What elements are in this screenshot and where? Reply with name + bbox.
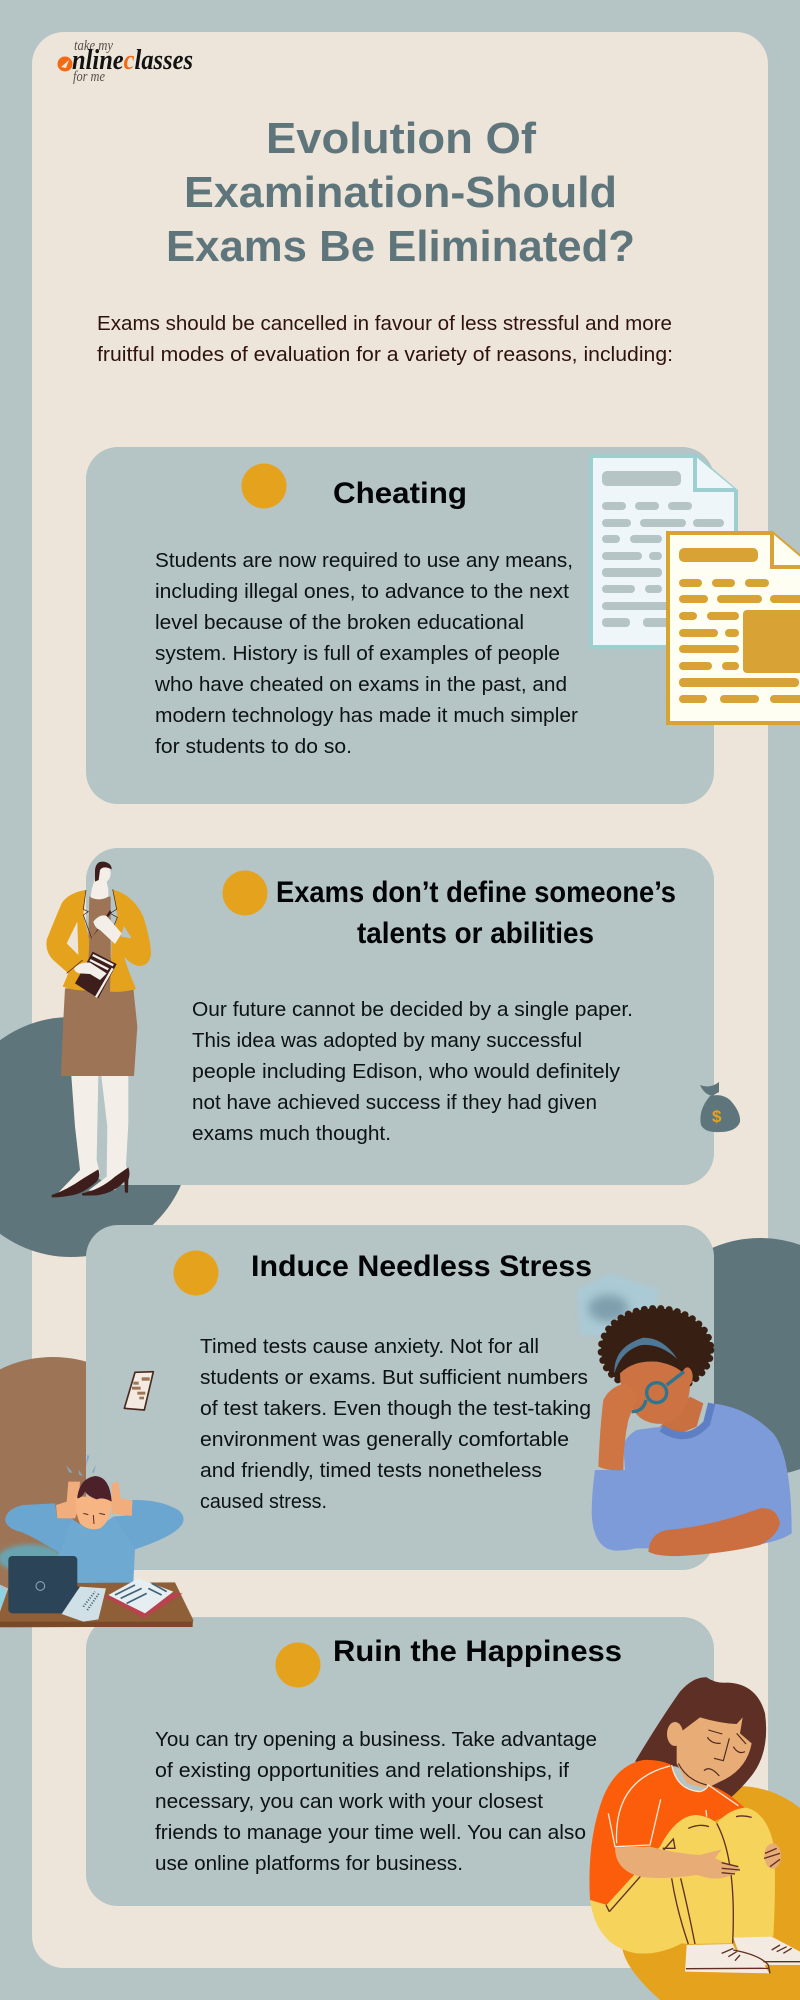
body text: stress: and friendly, timed tests nonetheless [200, 1459, 542, 1482]
logo: take my [74, 38, 113, 54]
neck [91, 878, 108, 899]
heading: cheating: Cheating [333, 477, 467, 510]
illustration: woman with book [46, 862, 151, 1197]
neck [660, 1397, 703, 1435]
panel: stress [86, 1225, 714, 1570]
bullet circle [276, 1642, 320, 1688]
screen glow [0, 1544, 62, 1572]
body text: talents: This idea was adopted by many successful [192, 1029, 582, 1052]
body text: happiness: use online platforms for business. [155, 1852, 463, 1875]
shoes [52, 1167, 129, 1197]
sleeves [5, 1503, 72, 1553]
body text: happiness [155, 1728, 597, 1875]
title: Examination-Should [184, 168, 617, 217]
jacket gap [67, 922, 78, 955]
panel: cheating [86, 447, 714, 804]
collar [662, 1403, 712, 1436]
heading: talents [276, 876, 676, 950]
intro text: Exams should be cancelled in favour of less stressful and more [97, 312, 672, 335]
face [620, 1361, 690, 1424]
open book [104, 1588, 183, 1618]
intro text [97, 312, 673, 366]
hair [601, 1308, 711, 1392]
glasses [632, 1372, 684, 1412]
head [76, 1497, 112, 1529]
hair [77, 1476, 112, 1502]
hair [635, 1677, 766, 1798]
body text: stress: students or exams. But sufficient numbers [200, 1366, 588, 1389]
jacket [46, 890, 89, 990]
body text: cheating: including illegal ones, to advance to the next [155, 580, 569, 603]
body text: happiness: friends to manage your time well. You can also [155, 1821, 586, 1844]
cloud [577, 1273, 660, 1337]
dress top [83, 897, 117, 993]
panel: talents [86, 848, 714, 1185]
bullet circle [242, 464, 286, 508]
left forearm [598, 1383, 638, 1470]
shirt [589, 1760, 745, 1905]
decorative circle: teal left [0, 1017, 191, 1257]
body text: talents: Our future cannot be decided by a single paper. [192, 998, 633, 1021]
body text: stress: Timed tests cause anxiety. Not for all [200, 1335, 539, 1358]
book hand [74, 963, 107, 980]
body text: happiness: You can try opening a business. Take advantage [155, 1728, 597, 1751]
body text: happiness: necessary, you can work with your closest [155, 1790, 543, 1813]
logo: nlineclasses [72, 45, 193, 76]
body text: cheating: level because of the broken educational [155, 611, 524, 634]
body text: stress: of test takers. Even though the test-taking [200, 1397, 591, 1420]
panel: happiness [86, 1617, 714, 1906]
bullet circle [222, 870, 268, 916]
illustration: woman with glasses [577, 1273, 792, 1556]
icon: phone [124, 1372, 153, 1410]
body text: talents [192, 998, 633, 1145]
right forearm [648, 1508, 780, 1556]
body text: happiness: of existing opportunities and relationships, if [155, 1759, 569, 1782]
title [166, 114, 635, 271]
body text: cheating: who have cheated on exams in the past, and [154, 673, 567, 696]
face [83, 1513, 105, 1524]
arm [615, 1847, 740, 1879]
body text: cheating: modern technology has made it much simpler [155, 704, 578, 727]
illustration: stressed man at desk [0, 1455, 193, 1627]
body text: stress [200, 1335, 591, 1513]
headband [614, 1338, 677, 1373]
sweater body [57, 1517, 135, 1583]
body text: stress: environment was generally comfortable [200, 1428, 569, 1451]
sweater [592, 1403, 792, 1551]
title: Evolution Of [266, 114, 536, 163]
icon: document amber [668, 533, 800, 723]
desk [0, 1582, 193, 1627]
body text: talents: not have achieved success if they had given [192, 1091, 597, 1114]
logo: for me [73, 69, 105, 85]
body text: cheating: system. History is full of examples of people [155, 642, 560, 665]
icon: document blue [591, 456, 736, 647]
bullet circle [174, 1250, 218, 1296]
papers [62, 1587, 106, 1622]
body text: talents: exams much thought. [192, 1122, 391, 1145]
body text: talents: people including Edison, who would definitely [192, 1060, 621, 1083]
forearms [56, 1482, 132, 1518]
sweat drops [66, 1455, 96, 1476]
heading: stress: Induce Needless Stress [251, 1250, 592, 1283]
decorative circle: teal right [641, 1238, 800, 1476]
pen hand [93, 910, 112, 937]
face [667, 1717, 752, 1788]
skirt [61, 988, 137, 1076]
heading: talents: Exams don’t define someone’s [276, 876, 676, 909]
book [75, 952, 117, 998]
illustration: sad girl [589, 1677, 800, 1973]
head [96, 864, 111, 883]
body text: cheating: for students to do so. [155, 735, 352, 758]
body text: cheating: Students are now required to use any means, [155, 549, 573, 572]
heading: talents: talents or abilities [357, 917, 594, 950]
title: Exams Be Eliminated? [166, 222, 635, 271]
laptop [8, 1556, 77, 1613]
body text: cheating [154, 549, 578, 758]
body text: stress: caused stress. [200, 1490, 327, 1513]
logo [58, 38, 193, 85]
lapels [67, 889, 117, 973]
pants [590, 1808, 775, 1954]
intro text: fruitful modes of evaluation for a variety of reasons, including: [97, 343, 673, 366]
icon: money bag: $ [712, 1107, 722, 1126]
legs [58, 1076, 128, 1193]
decorative shape: amber bottom right [622, 1786, 800, 2000]
heading: happiness: Ruin the Happiness [333, 1635, 622, 1668]
decorative circle: brown left [0, 1357, 173, 1597]
icon: money bag [700, 1082, 740, 1132]
shoes [733, 1937, 800, 1965]
